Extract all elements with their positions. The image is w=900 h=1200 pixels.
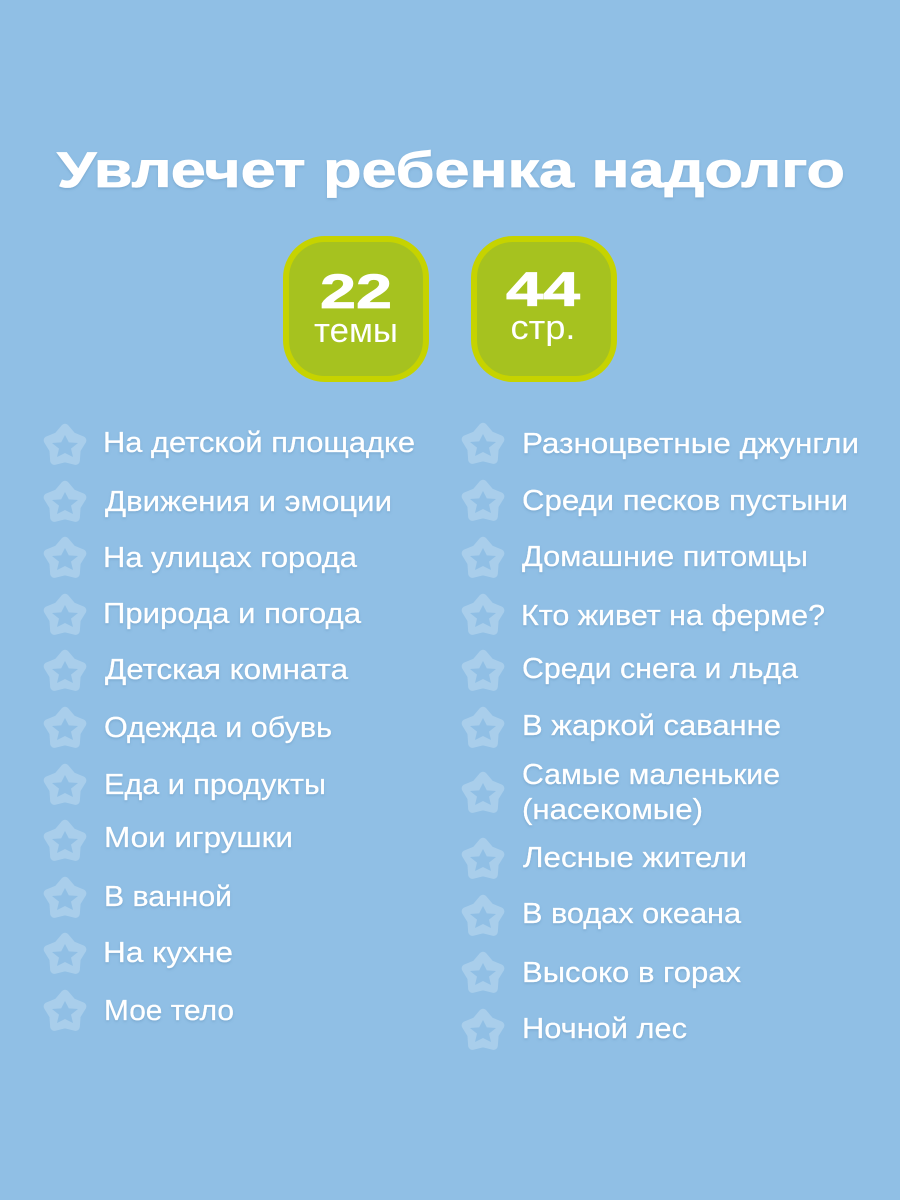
- item: Природа и погода: Природа и погода: [103, 598, 362, 630]
- badge: 44 стр.: [474, 239, 614, 379]
- item: Одежда и обувь: Одежда и обувь: [104, 712, 332, 744]
- item: Среди песков пустыни: Среди песков пустыни: [522, 485, 848, 517]
- left list: [48, 427, 415, 1027]
- item: На детской площадке: На детской площадке: [103, 427, 415, 459]
- badge: 22 темы: 22: [320, 266, 392, 319]
- item: Мое тело: Мое тело: [104, 995, 234, 1027]
- item: Движения и эмоции: Движения и эмоции: [105, 486, 392, 518]
- badge: 22 темы: [286, 239, 426, 379]
- item: Еда и продукты: Еда и продукты: [104, 769, 326, 801]
- item: Мои игрушки: Мои игрушки: [104, 822, 293, 854]
- item: На кухне: [48, 937, 233, 970]
- item: Среди снега и льда: Среди снега и льда: [522, 653, 799, 685]
- item: Самые маленькие (насекомые): [466, 759, 780, 826]
- item: В ванной: В ванной: [104, 881, 232, 913]
- item: Домашние питомцы: Домашние питомцы: [522, 541, 808, 573]
- item: Мое тело: [48, 994, 234, 1027]
- item: Детская комната: Детская комната: [105, 654, 349, 686]
- item: В ванной: [48, 881, 232, 914]
- item: Ночной лес: Ночной лес: [522, 1013, 687, 1045]
- badge: 44 стр.: 44: [506, 264, 580, 317]
- item: Самые маленькие (насекомые): Самые маленькие: [522, 759, 780, 791]
- item: Мои игрушки: [48, 822, 293, 857]
- right list: [466, 427, 859, 1046]
- item: В жаркой саванне: В жаркой саванне: [522, 710, 781, 742]
- item: Ночной лес: [466, 1013, 687, 1046]
- item: В водах океана: В водах океана: [522, 898, 742, 930]
- item: На кухне: На кухне: [103, 937, 233, 969]
- item: На улицах города: На улицах города: [103, 542, 358, 574]
- badge: 22 темы: темы: [314, 312, 398, 350]
- badge: 44 стр.: стр.: [510, 309, 576, 347]
- item: Высоко в горах: Высоко в горах: [522, 957, 742, 989]
- item: Разноцветные джунгли: Разноцветные джунгли: [522, 428, 859, 460]
- item: Кто живет на ферме?: Кто живет на ферме?: [521, 600, 825, 632]
- item: Лесные жители: Лесные жители: [523, 842, 747, 874]
- item: Самые маленькие (насекомые): (насекомые): [522, 794, 703, 826]
- title: Увлечет ребенка надолго: [57, 142, 845, 198]
